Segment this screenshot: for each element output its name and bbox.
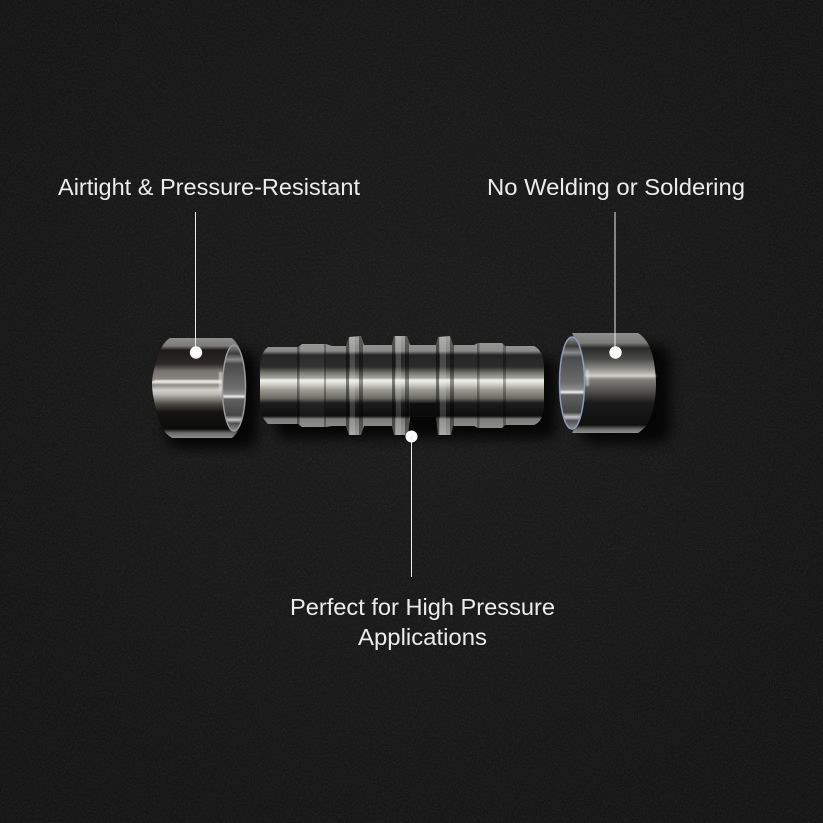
central double-ended connector [258,336,546,436]
marker dot [406,430,418,442]
label: No Welding or Soldering [487,174,745,200]
callout: perfect for high pressure applications [290,430,555,650]
ring body [572,333,656,433]
left compression ring [152,338,246,438]
leader line [614,212,616,352]
callout: airtight and pressure-resistant [58,174,360,359]
ring bore [560,337,584,429]
marker dot [190,346,202,359]
connector sections and grooves [297,336,506,436]
label: Airtight & Pressure-Resistant [58,174,360,200]
ring body [152,338,246,438]
label: Perfect for High Pressure [290,594,555,620]
marker dot [609,346,622,359]
right compression ring [560,333,656,433]
leader line [410,436,412,577]
callout: no welding or soldering [487,174,745,359]
ring highlights [586,370,656,386]
ring highlights [154,372,222,390]
fitting shadows [166,345,670,448]
leader line [194,212,196,352]
label second line: Applications [358,624,487,650]
ring bore [222,345,246,431]
connector body [258,336,546,436]
